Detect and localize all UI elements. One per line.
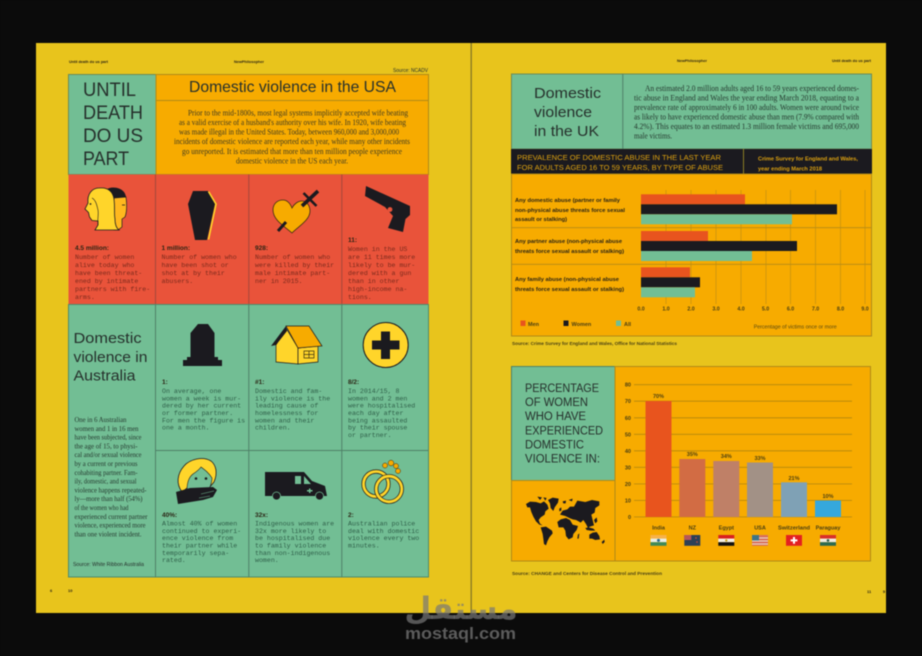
icon: silenced woman (176, 459, 217, 504)
text block: Australia intro: have been subjected, since (74, 433, 142, 442)
text block: Australia intro: One in 6 Australian (74, 415, 127, 424)
page numbers right (867, 589, 886, 594)
stat: 1 million (162, 245, 237, 285)
x axis labels: 5.0 (762, 306, 769, 312)
stat: 32x: be hospitalised due (255, 535, 330, 542)
y axis labels: 60 (625, 416, 631, 422)
row labels: threats force sexual assault or stalking) (515, 287, 624, 293)
text block: Australia intro: women and 1 in 16 men (74, 424, 139, 433)
stat: 8/2: by their spouse (348, 425, 407, 432)
heading: Australia: Australia (74, 368, 137, 384)
text block: UK intro: An estimated 2.0 million adults aged 16 to 59 years experienced domes- (645, 84, 859, 93)
panel: percentage of women title: WHO HAVE (525, 411, 586, 423)
bar chart: abuse by type (512, 174, 872, 336)
flag: India (650, 535, 666, 546)
page header left: NewPhilosopher (234, 59, 264, 64)
stat: 32x: to family violence (255, 542, 326, 550)
country labels: NZ (689, 526, 697, 532)
bar: Switzerland (781, 476, 807, 517)
bar chart: percentage by country (615, 366, 870, 561)
stat: 40%: continued to experi- (162, 528, 241, 535)
row labels (515, 198, 626, 293)
stat: 928: male intimate part- (255, 270, 330, 277)
icon: wedding rings (364, 460, 402, 502)
stat: 1: women a week is mur- (162, 395, 241, 402)
heading: Australia: violence in (74, 350, 148, 366)
stat: 1 million: shot at by their (162, 270, 225, 277)
row labels: threats force sexual assault or stalking) (515, 249, 624, 255)
panel: domestic violence in the UK (512, 74, 872, 149)
x axis labels: 6.0 (787, 306, 794, 312)
stat: 40%: rated. (162, 557, 186, 564)
panel: domestic violence in the USA (156, 74, 428, 174)
panel: Australia (68, 304, 428, 577)
legend: All (624, 322, 632, 328)
bar: India: 70% (653, 394, 664, 400)
panel: US statistics (68, 174, 428, 304)
legend: Women (572, 322, 592, 328)
stat: 40%: their partner while (162, 542, 237, 550)
stat: 32x: women. (255, 557, 279, 564)
source: crime survey: Source: Crime Survey for England and Wales, Office for National Statistics (512, 341, 677, 347)
bar: NZ (679, 452, 705, 517)
bars: any family abuse (641, 267, 700, 297)
stat: #1 (255, 379, 330, 432)
y axis labels: 10 (625, 498, 631, 504)
country labels: Paraguay (816, 526, 841, 532)
stat: 1: For men the figure is (162, 417, 245, 424)
x axis labels (637, 306, 869, 312)
y axis labels: 40 (625, 449, 631, 455)
page header left: Source: NCADV (393, 68, 428, 74)
x axis labels: 0.0 (637, 306, 645, 312)
stat: 1: or former partner. (162, 410, 233, 417)
x axis labels: 8.0 (837, 306, 844, 312)
panel: world map (512, 480, 615, 561)
heading: UK (534, 85, 602, 140)
stat: 928: Number of women who (255, 254, 330, 261)
icon: gravestone (183, 324, 222, 366)
stat: 32x: 32x: (255, 512, 268, 519)
stat: 2 (348, 512, 419, 550)
stat: 40%: ence violence from (162, 535, 233, 542)
panel: percentage of women title: PERCENTAGE (525, 383, 599, 395)
chart heading band: PREVALENCE OF DOMESTIC ABUSE IN THE LAST YEAR (517, 153, 722, 162)
stat: 4.5 million (75, 245, 150, 301)
row labels: Any family abuse (non-physical abuse (515, 277, 619, 283)
stat: 11: are 11 times more (348, 254, 415, 261)
text block: USA intro: incidents of domestic violence are reported each year, while many other incidents (174, 137, 410, 146)
x axis labels: 4.0 (737, 306, 745, 312)
row labels: assault or stalking) (515, 217, 567, 223)
panel: percentage of women title: VIOLENCE IN: (525, 454, 600, 466)
stat: 1: 1: (162, 379, 168, 386)
flag: Egypt (718, 535, 734, 546)
panel: until death title: DO US (83, 126, 143, 147)
y axis labels: 0 (628, 515, 631, 521)
text block: UK intro (634, 84, 860, 140)
x axis labels: 3.0 (712, 306, 720, 312)
stat: 1 million: Number of women who (162, 254, 237, 261)
icon: coffin (188, 191, 216, 240)
page header left (69, 59, 428, 74)
stat: 32x: than non-indigenous (255, 550, 330, 557)
stat: 1: dered by her current (162, 403, 241, 410)
y axis labels: 30 (625, 465, 631, 471)
bar: Switzerland: 21% (788, 476, 800, 482)
axis caption: Percentage of victims once or more (754, 325, 837, 331)
text block: USA intro: Prior to the mid-1800s, most legal systems implicitly accepted wife beating (188, 108, 409, 118)
page header left: Until death do us part (69, 59, 109, 64)
text block: Australia intro: experienced current partner (74, 512, 148, 521)
stat: 4.5 million: have been threat- (75, 270, 142, 277)
country labels (652, 526, 841, 532)
stat: 11 (348, 237, 415, 301)
stat: 11: 11: (348, 237, 357, 244)
text block: Australia intro: violence, experienced more (74, 521, 146, 530)
page numbers left: 6 (50, 588, 53, 593)
y axis labels: 20 (625, 482, 631, 488)
stat: 928 (255, 245, 334, 285)
panel: percentage of women title: EXPERIENCED (525, 426, 603, 438)
watermark: mostaql.com (405, 624, 516, 643)
row labels: Any domestic abuse (partner or family (515, 198, 620, 204)
row labels: non-physical abuse threats force sexual (515, 208, 626, 214)
stat: 928: ner in 2015. (255, 278, 302, 285)
stat: 1 million: 1 million: (162, 245, 190, 252)
source: White Ribbon: Source: White Ribbon Australia (73, 562, 145, 568)
text block: USA intro: was made illegal in the United States. Today, between 960,000 and 3,000,000 (179, 128, 399, 137)
text block: Australia intro: by a current or previous (74, 459, 138, 468)
text block: Australia intro: ly—more than half (54%) (74, 494, 143, 503)
panel: percentage of women title (512, 366, 615, 480)
text block: Australia intro: cohabiting partner. Fam- (74, 468, 138, 477)
panel: until death title: UNTIL (83, 80, 136, 101)
panel: percentage of women title: DOMESTIC (525, 440, 584, 452)
page numbers right: 11 (867, 589, 872, 594)
bar: Egypt (713, 454, 739, 517)
source: CHANGE: Source: CHANGE and Centers for Disease Control and Prevention (512, 571, 662, 577)
watermark: مستقل (404, 591, 518, 627)
text block: USA intro: domestic violence in the US each year. (236, 156, 348, 166)
legend (520, 320, 632, 328)
chart heading band (511, 149, 872, 174)
text block: USA intro (174, 108, 410, 166)
x axis labels: 2.0 (687, 306, 695, 312)
text block: USA intro: as a valid exercise of a husband's authority over his wife. In 1920, wife beating (179, 118, 407, 127)
stat: 1 (162, 379, 245, 432)
watermark (404, 591, 518, 643)
stat: 40% (162, 512, 241, 564)
stat: 8/2: In 2014/15, 8 (348, 388, 399, 395)
stat: 32x (255, 512, 334, 564)
bars: any partner abuse (641, 231, 797, 261)
chart heading band: year ending March 2018 (758, 166, 822, 172)
chart heading band: FOR ADULTS AGED 16 TO 59 YEARS, BY TYPE OF ABUSE (517, 163, 723, 172)
y axis labels: 70 (625, 399, 631, 405)
stat: #1: Domestic and fam- (255, 388, 322, 395)
stat: 11: dered with a gun (348, 270, 411, 277)
stat: 11: Women in the US (348, 246, 407, 253)
page header right: Until death do us part (832, 58, 872, 63)
stat: #1: children. (255, 425, 291, 432)
text block: Australia intro: cal and/or sexual violence (74, 450, 142, 459)
icon: ambulance (265, 472, 327, 500)
stat: 8/2: 8/2: (348, 379, 359, 386)
flag: NZ (684, 535, 700, 546)
heading: UK: in the UK (534, 123, 599, 140)
text block: Australia intro: ily, domestic, and sexual (74, 477, 136, 486)
icon: house (271, 326, 322, 364)
page numbers left (50, 588, 73, 593)
chart heading band: Crime Survey for England and Wales, (758, 156, 858, 162)
stat: 4.5 million: partners with fire- (75, 286, 150, 293)
text block: Australia intro: of the women who had (74, 503, 129, 512)
stat: 2: Australian police (348, 520, 415, 528)
panel: until death title: DEATH (83, 103, 143, 124)
panel: until death title (68, 74, 156, 174)
text block: Australia intro (74, 415, 148, 538)
stat: #1: leading cause of (255, 403, 318, 410)
stat: 11: high-income na- (348, 286, 407, 293)
stat: 1: one a month. (162, 425, 209, 432)
country labels: Egypt (719, 526, 734, 532)
text block: UK intro: prevalence rate of approximately 6 in 100 adults. Women were around twice (634, 103, 859, 112)
stat: 11: than in other (348, 278, 399, 285)
stat: #1: women and their (255, 417, 314, 424)
stat: 2: deal with domestic (348, 528, 419, 535)
bars: any domestic abuse (641, 194, 837, 224)
stat: 8/2: were hospitalised (348, 403, 415, 410)
stat: 2: minutes. (348, 542, 380, 550)
stat: 1: On average, one (162, 388, 221, 395)
stat: 928: 928: (255, 245, 268, 252)
stat: 40%: 40%: (162, 512, 177, 519)
icon: two heads (85, 188, 127, 230)
text block: Australia intro: the age of 15, to physi- (74, 441, 138, 450)
bar: USA (747, 456, 773, 517)
bar: Paraguay (815, 494, 841, 517)
stat: 32x: Indigenous women are (255, 520, 334, 528)
heading: Australia (74, 331, 148, 384)
text block: UK intro: male victims. (634, 132, 672, 140)
heading: USA: Domestic violence in the USA (189, 79, 396, 96)
x axis labels: 1.0 (662, 306, 670, 312)
text block: Australia intro: violence happens repeated- (74, 485, 147, 494)
flag: Switzerland (786, 535, 802, 546)
stat: #1: ily violence is the (255, 395, 330, 402)
panel: until death title: PART (83, 149, 129, 170)
page header right: NewPhilosopher (677, 58, 707, 63)
legend: Men (528, 322, 540, 328)
flag: Paraguay (820, 535, 836, 546)
stat: 4.5 million: arms. (75, 294, 95, 301)
icon: world map (526, 497, 605, 545)
stat: 11: tions. (348, 294, 372, 301)
stat: 4.5 million: Number of women (75, 254, 134, 261)
text block: USA intro: go unreported. It is estimated that more than ten million people experience (182, 147, 402, 156)
panel: percentage of women title: OF WOMEN (525, 397, 588, 409)
flag: USA (752, 535, 768, 546)
page header right (677, 58, 872, 63)
stat: 11: likely to be mur- (348, 262, 415, 269)
stat: 8/2 (348, 379, 415, 439)
bar: NZ: 35% (687, 452, 698, 458)
stat: 1 million: abusers. (162, 278, 193, 285)
text block: UK intro: 4.2%). This equates to an estimated 1.3 million female victims and 695,000 (634, 122, 859, 131)
stat: 928: were killed by their (255, 262, 334, 269)
icon: handgun (365, 186, 410, 232)
stat: 2: violence every two (348, 535, 419, 542)
stat: 32x: 32x more likely to (255, 528, 326, 535)
bar: Paraguay: 10% (822, 494, 834, 500)
y axis labels: 80 (625, 383, 631, 389)
text block: UK intro: tic abuse in England and Wales the year ending March 2018, equating to a (634, 93, 859, 102)
stat: 40%: Almost 40% of women (162, 520, 237, 528)
y axis labels (625, 383, 631, 521)
stat: 8/2: women and 2 men (348, 395, 407, 402)
text block: UK intro: as likely to have experienced domestic abuse than men (7.9% compared with (634, 112, 860, 121)
country labels: Switzerland (778, 526, 810, 532)
stat: 40%: temporarily sepa- (162, 550, 229, 557)
stat: 4.5 million: ened by intimate (75, 278, 138, 285)
stat: 8/2: being assaulted (348, 417, 407, 424)
stat: 8/2: each day after (348, 410, 403, 417)
heading: UK: violence (534, 104, 592, 121)
row labels: Any partner abuse (non-physical abuse (515, 239, 622, 245)
bar: Egypt: 34% (721, 454, 732, 460)
stat: 4.5 million: 4.5 million: (75, 245, 109, 252)
stat: 1 million: have been shot or (162, 262, 229, 269)
x axis labels: 7.0 (812, 306, 819, 312)
x axis labels: 9.0 (861, 306, 869, 312)
y axis labels: 50 (625, 432, 631, 438)
country labels: USA (754, 526, 766, 532)
bar: USA: 33% (754, 456, 766, 462)
text block: Australia intro: than one violent incident. (74, 529, 142, 538)
heading: Australia: Domestic (74, 331, 142, 347)
heading: UK: Domestic (534, 85, 602, 102)
icon: medical cross (363, 322, 408, 368)
page numbers right: 9 (883, 589, 886, 594)
icon: heart pierced by dagger (273, 191, 318, 233)
stat: #1: homelessness for (255, 410, 318, 417)
stat: 4.5 million: alive today who (75, 262, 134, 269)
stat: 2: 2: (348, 512, 354, 519)
stat: #1: #1: (255, 379, 264, 386)
country labels: India (652, 526, 666, 532)
bar: India (646, 394, 672, 517)
page numbers left: 10 (68, 588, 73, 593)
stat: 8/2: or partner. (348, 432, 392, 439)
